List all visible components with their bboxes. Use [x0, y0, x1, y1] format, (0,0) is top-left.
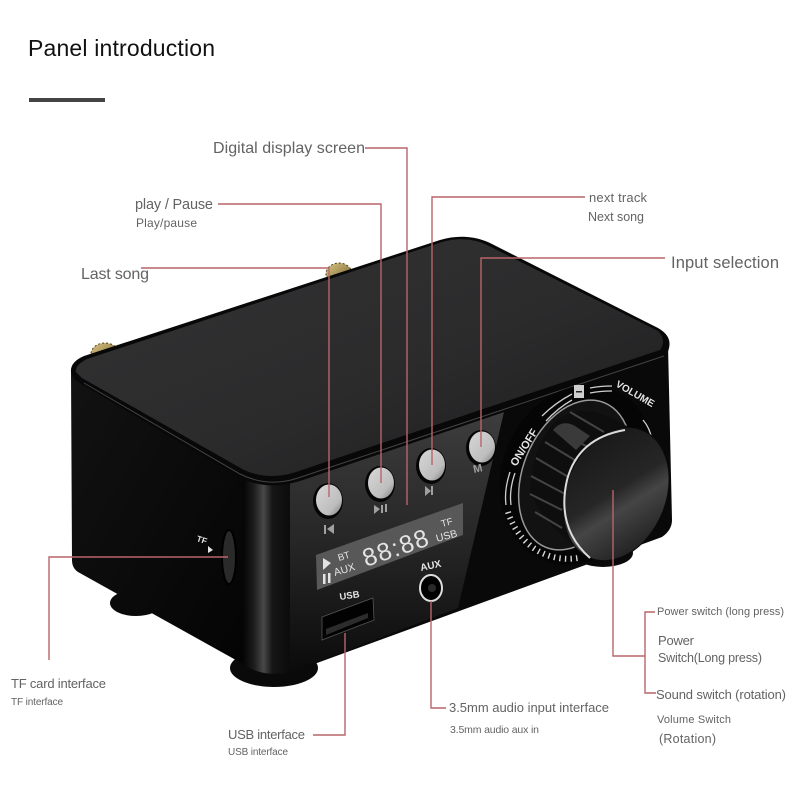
amplifier device — [71, 237, 688, 687]
minus box — [574, 385, 584, 398]
title underline — [29, 98, 105, 102]
display screen: USB — [435, 528, 459, 545]
label: next track: next track — [589, 190, 648, 205]
top face rim — [71, 237, 670, 485]
TF card slot — [195, 530, 236, 584]
left side face — [71, 372, 243, 664]
label: digital display screen: Digital display screen — [213, 140, 365, 157]
label: power switch — [657, 606, 784, 665]
knob dial base — [473, 361, 683, 589]
label: power switch: Switch(Long press) — [658, 651, 762, 665]
rear gold terminals — [91, 263, 352, 365]
label: input selection: Input selection — [671, 254, 779, 272]
label: next track: Next song — [588, 210, 644, 224]
knob grip — [530, 411, 660, 558]
title: Panel introduction — [28, 35, 215, 61]
AUX jack — [419, 559, 443, 601]
lighter control panel — [290, 412, 504, 672]
front face — [243, 345, 672, 672]
label: play pause: play / Pause — [135, 197, 213, 213]
label: USB interface: USB interface — [228, 727, 305, 742]
USB port: USB — [339, 589, 360, 603]
display screen: BT — [337, 550, 352, 564]
label: TF card interface — [11, 676, 106, 708]
ON/OFF label: ON/OFF — [508, 427, 541, 469]
volume knob — [473, 361, 688, 589]
rubber feet — [110, 539, 633, 687]
label: 3.5mm audio input: 3.5mm audio input interface — [449, 700, 609, 715]
label: last song: Last song — [81, 266, 149, 283]
button icons — [324, 462, 484, 534]
scale ticks — [508, 512, 578, 559]
label: next track — [588, 190, 648, 224]
label: TF card interface: TF interface — [11, 697, 63, 708]
top face — [76, 239, 663, 476]
button icons: M — [472, 462, 484, 476]
outer silver ring — [498, 383, 652, 567]
label: 3.5mm audio input — [449, 700, 609, 736]
display screen: TF — [440, 516, 454, 530]
scale arcs — [506, 386, 652, 505]
VOLUME label: VOLUME — [614, 379, 656, 410]
display screen — [316, 503, 463, 590]
label: power switch: Power — [658, 633, 695, 648]
buttons — [313, 430, 496, 519]
TF card slot: TF — [195, 533, 208, 546]
label: play pause: Play/pause — [136, 216, 197, 230]
grip highlight — [553, 423, 590, 450]
rim highlight — [84, 356, 664, 482]
label: power switch: Power switch (long press) — [657, 606, 784, 618]
display screen: AUX — [332, 561, 357, 579]
label: play pause — [135, 197, 213, 230]
USB port — [322, 589, 374, 640]
display screen: 88:88 — [359, 524, 432, 573]
label: sound and volume switch: Sound switch (rotation) — [656, 687, 786, 702]
label: USB interface — [228, 727, 305, 758]
label: 3.5mm audio input: 3.5mm audio aux in — [450, 724, 539, 736]
grip ribs — [530, 412, 604, 528]
leader lines — [49, 148, 665, 735]
label: TF card interface: TF card interface — [11, 676, 106, 691]
knob silver edge — [564, 430, 625, 558]
label: sound and volume switch — [656, 687, 786, 746]
glossy front corner — [243, 478, 292, 674]
label: sound and volume switch: Volume Switch — [657, 714, 731, 726]
knob face — [544, 411, 688, 577]
AUX jack: AUX — [419, 559, 443, 574]
label: sound and volume switch: (Rotation) — [659, 732, 716, 746]
label: USB interface: USB interface — [228, 747, 288, 758]
